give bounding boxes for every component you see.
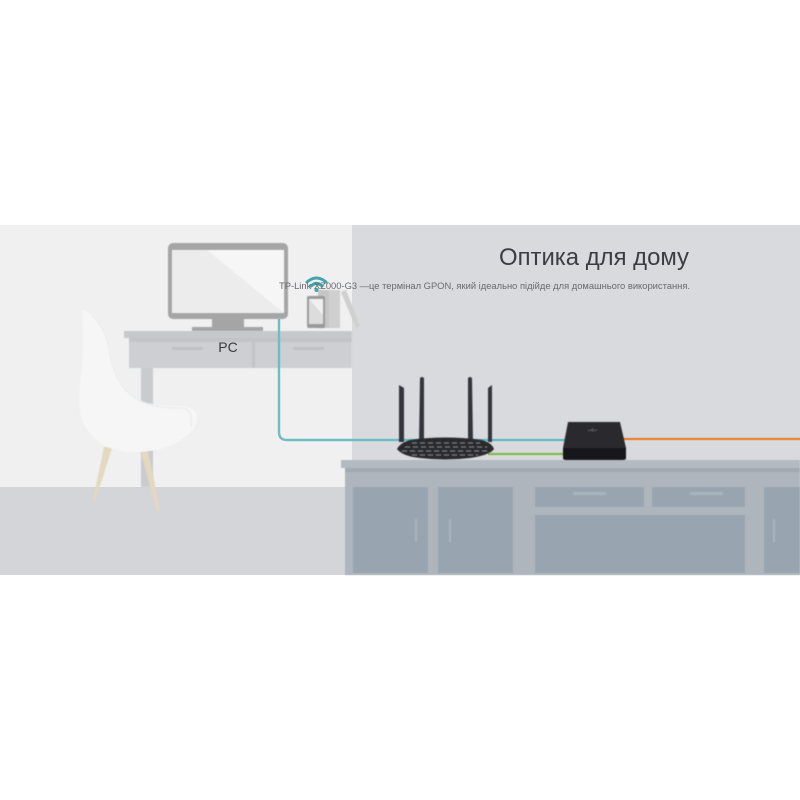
cabinet [341,460,800,575]
GPON terminal [563,422,626,460]
desk [124,331,352,487]
icon: wifi signal [307,278,326,292]
monitor [168,243,288,331]
room background [0,225,800,575]
title: Оптика для дому [499,244,689,271]
books [318,290,360,328]
router [397,377,494,460]
blue cable [279,319,566,440]
green cable [488,453,566,455]
subtitle: TP-Link XZ000-G3 —це термінал GPON, який ідеально підійде для домашнього використання. [279,280,690,291]
PC label: PC [218,339,238,355]
phone [307,296,325,328]
orange cable [622,438,800,440]
chair [79,310,197,511]
